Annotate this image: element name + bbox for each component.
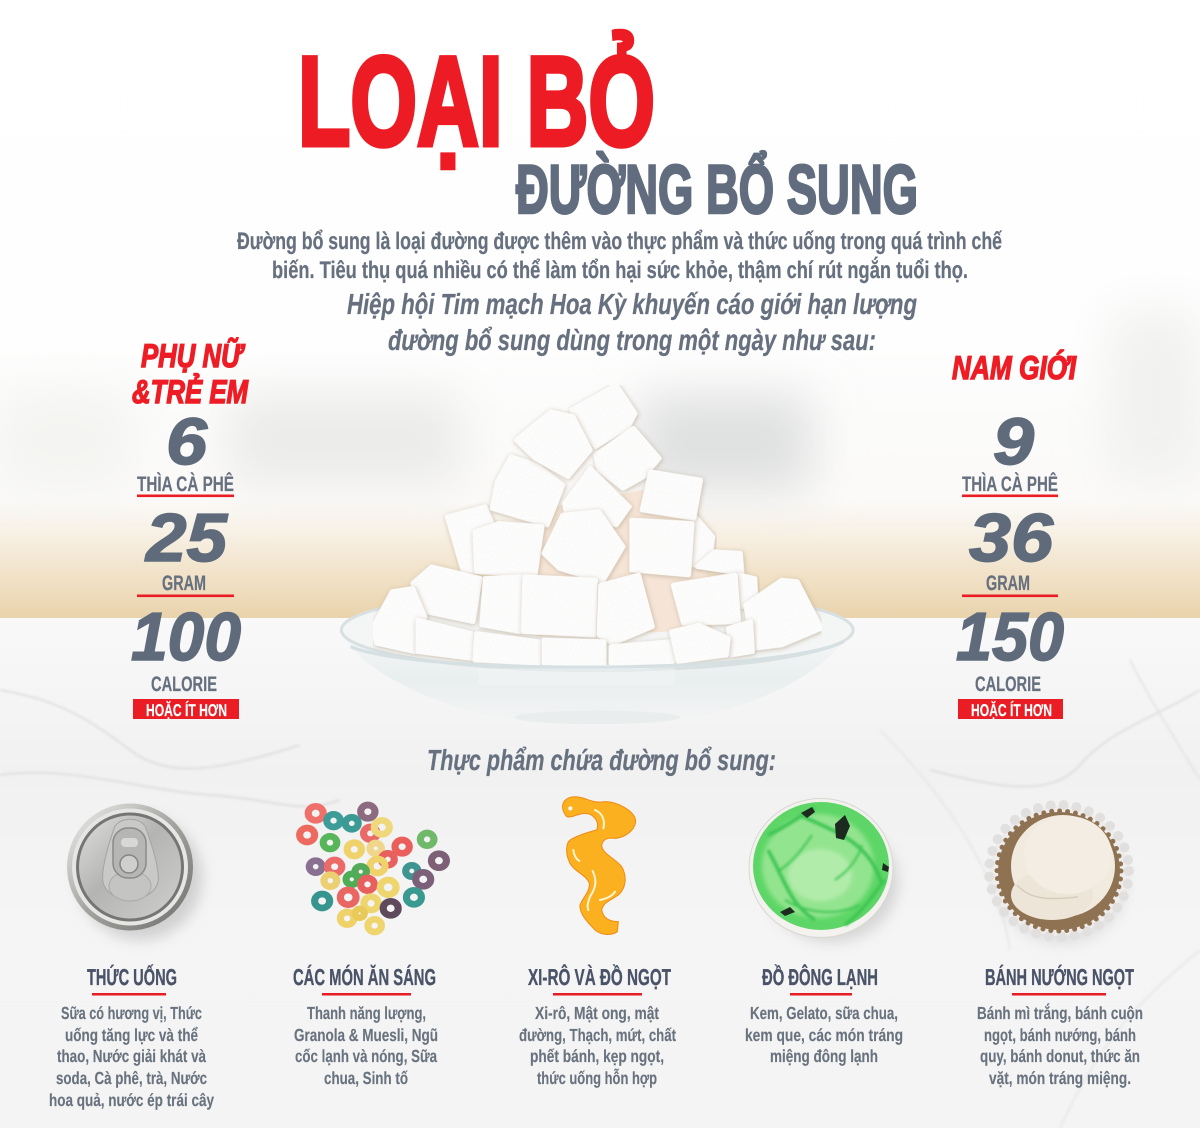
stat: teaspoons: 9 [993, 404, 1034, 478]
stat: grams: 36 [969, 500, 1054, 576]
icon: cereal loops [300, 805, 446, 932]
heading: frozen treats [762, 964, 878, 996]
recommendation statement [347, 289, 917, 357]
description: syrups and sweets: Xi-rô, Mật ong, mật [535, 1003, 659, 1023]
panel: drinks [49, 804, 214, 1110]
badge: or less [958, 699, 1063, 720]
heading: frozen treats: ĐỒ ĐÔNG LẠNH [762, 964, 878, 990]
subtitle: ĐƯỜNG BỔ SUNG [516, 151, 918, 228]
description: breakfast [294, 1003, 438, 1088]
stat: calories: 150 [956, 599, 1064, 675]
description: syrups and sweets: thức uống hỗn hợp [537, 1068, 657, 1088]
description: baked goods [977, 1003, 1143, 1088]
description: frozen treats [745, 1003, 903, 1066]
panel: men [952, 349, 1077, 720]
heading: syrups and sweets: XI-RÔ VÀ ĐỒ NGỌT [528, 964, 671, 990]
badge: or less: HOẶC ÍT HƠN [971, 700, 1052, 720]
description: baked goods: Bánh mì trắng, bánh cuộn [977, 1003, 1143, 1023]
section heading: foods with added sugar: Thực phẩm chứa đường bổ sung: [427, 745, 776, 777]
illustration: sugar cubes on glass plate [341, 385, 853, 724]
description: syrups and sweets [519, 1003, 676, 1088]
stat: teaspoons [137, 404, 234, 497]
heading: women and children: PHỤ NỮ [141, 337, 245, 374]
panel: women and children [131, 337, 249, 720]
panel: breakfast [293, 805, 446, 1088]
description: baked goods: quy, bánh donut, thức ăn [980, 1046, 1140, 1066]
badge: or less [133, 699, 239, 720]
stat: teaspoons: 6 [166, 404, 208, 478]
heading: women and children: &TRẺ EM [132, 373, 249, 410]
description: drinks: hoa quả, nước ép trái cây [49, 1090, 214, 1110]
stat: grams [962, 500, 1058, 597]
description: breakfast: chua, Sinh tố [324, 1068, 408, 1088]
description: drinks: thao, Nước giải khát và [57, 1046, 206, 1066]
stat: grams: GRAM [986, 572, 1030, 595]
icon: cupcake [989, 805, 1129, 944]
description: breakfast: cốc lạnh và nóng, Sữa [295, 1046, 437, 1066]
stat: grams: 25 [144, 500, 228, 576]
icon: syrup drizzle [563, 797, 636, 934]
icon: ice cream cup [749, 798, 898, 942]
heading: breakfast: CÁC MÓN ĂN SÁNG [293, 964, 436, 990]
intro paragraph [237, 228, 1002, 284]
icon: drink can [67, 804, 202, 940]
stat: teaspoons: THÌA CÀ PHÊ [962, 472, 1058, 496]
description: syrups and sweets: phết bánh, kẹp ngọt, [530, 1046, 664, 1066]
description: breakfast: Thanh năng lượng, [307, 1003, 426, 1023]
description: drinks [49, 1003, 214, 1110]
marble veins [0, 660, 1200, 1128]
heading: drinks: THỨC UỐNG [87, 964, 177, 990]
description: frozen treats: kem que, các món tráng [745, 1025, 903, 1045]
panel: syrups and sweets [519, 797, 676, 1088]
stat: calories: CALORIE [975, 673, 1041, 696]
description: drinks: uống tăng lực và thể [65, 1025, 198, 1045]
stat: grams [137, 500, 234, 597]
description: breakfast: Granola & Muesli, Ngũ [294, 1025, 438, 1045]
heading: women and children [132, 337, 249, 410]
recommendation statement: đường bổ sung dùng trong một ngày như sau: [388, 325, 876, 357]
description: drinks: soda, Cà phê, trà, Nước [56, 1068, 207, 1088]
recommendation statement: Hiệp hội Tim mạch Hoa Kỳ khuyến cáo giới hạn lượng [347, 289, 917, 321]
stat: teaspoons: THÌA CÀ PHÊ [137, 472, 234, 496]
badge: or less: HOẶC ÍT HƠN [146, 700, 227, 720]
heading: men: NAM GIỚI [952, 349, 1077, 386]
description: baked goods: vặt, món tráng miệng. [989, 1068, 1131, 1088]
stat: calories: 100 [131, 599, 241, 675]
intro paragraph: biến. Tiêu thụ quá nhiều có thể làm tổn hại sức khỏe, thậm chí rút ngắn tuổi thọ. [272, 256, 968, 284]
stat: grams: GRAM [162, 572, 206, 595]
description: frozen treats: miệng đông lạnh [770, 1046, 878, 1066]
panel: baked goods [977, 805, 1143, 1088]
description: frozen treats: Kem, Gelato, sữa chua, [750, 1003, 898, 1023]
heading: drinks [87, 964, 177, 996]
description: drinks: Sữa có hương vị, Thức [61, 1003, 202, 1023]
panel: frozen treats [745, 798, 903, 1066]
title: LOẠI BỎ [298, 30, 655, 172]
stat: teaspoons [962, 404, 1058, 497]
description: syrups and sweets: đường, Thạch, mứt, chất [519, 1025, 676, 1045]
stat: calories: CALORIE [151, 673, 217, 696]
description: baked goods: ngọt, bánh nướng, bánh [984, 1025, 1136, 1045]
